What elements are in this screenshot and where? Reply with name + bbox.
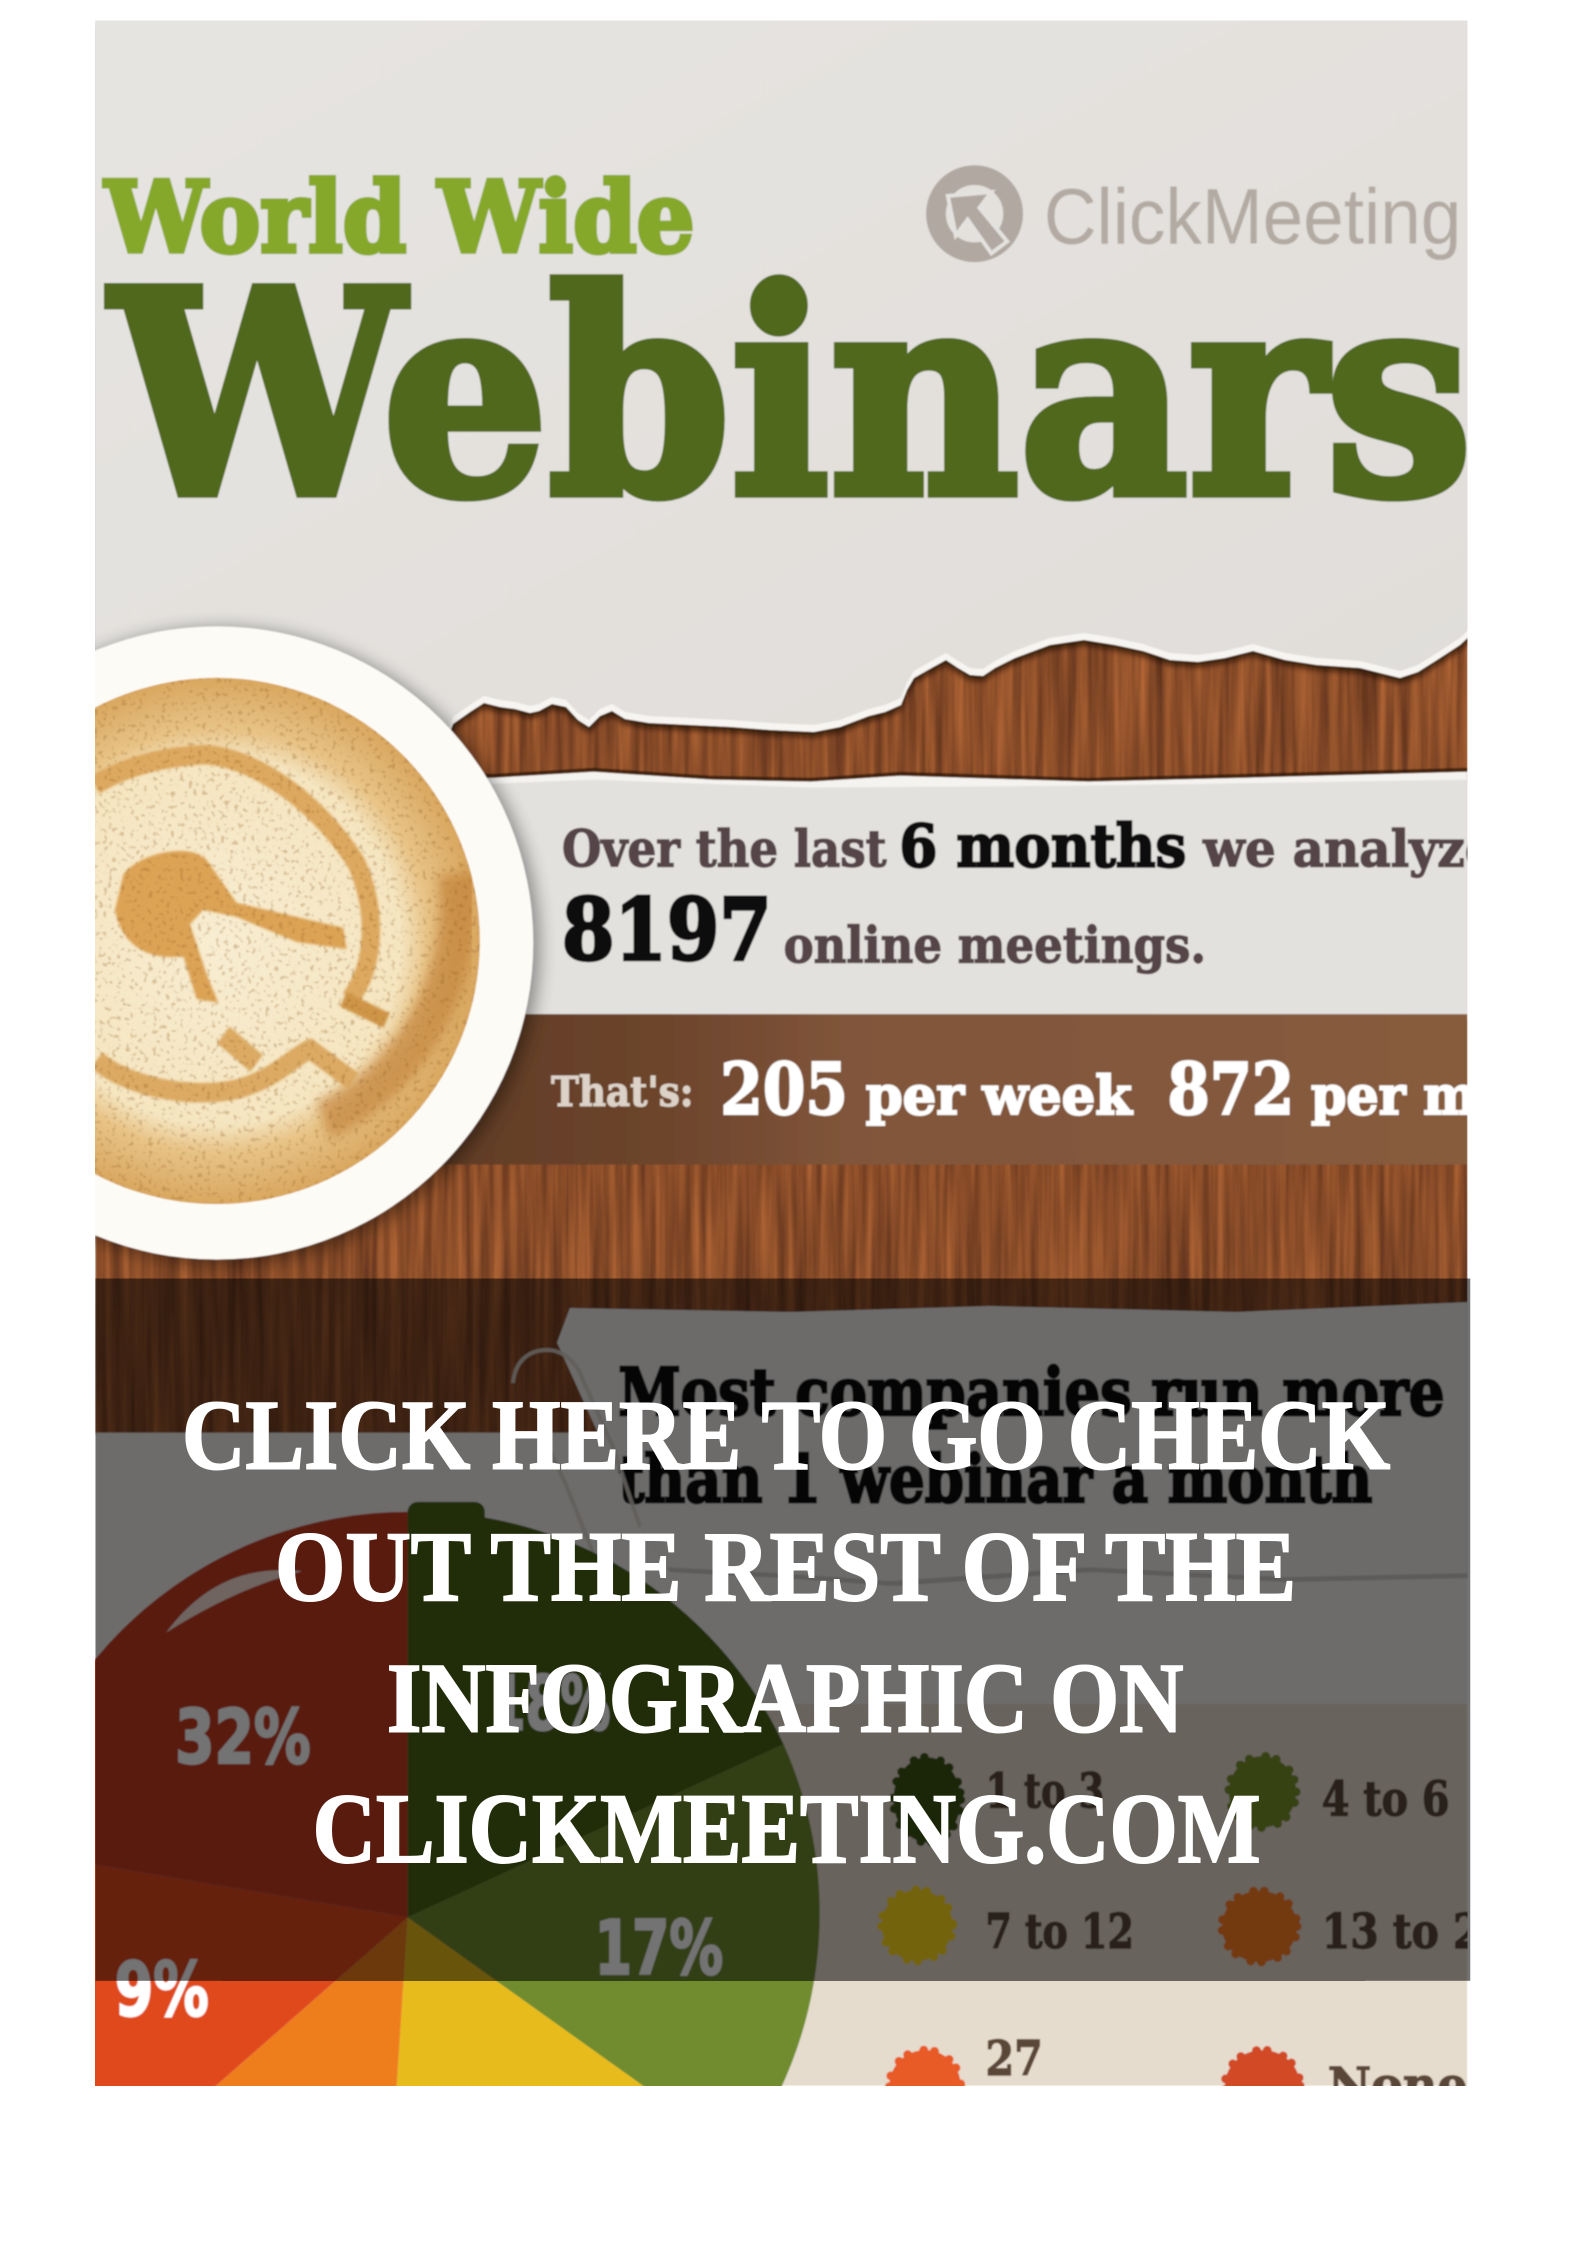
legend item: 1 to 3: 1 to 3 — [985, 1764, 1104, 1820]
slice: yellow — [381, 1917, 741, 2245]
legend item: 27 — [889, 2031, 1043, 2121]
latte art logo — [0, 673, 485, 1207]
wood background — [96, 613, 1467, 1435]
logo wordmark: ClickMeeting — [1044, 171, 1461, 260]
icon: paperclip — [513, 1350, 640, 1553]
foam speckle — [0, 673, 485, 1207]
label: 9%: 9% — [115, 1945, 209, 2033]
pie tab — [408, 1502, 485, 1561]
text: that's: That's: — [551, 1067, 694, 1116]
label: 17%: 17% — [595, 1904, 723, 1992]
slice: dark green — [408, 1512, 784, 1917]
slice: dark red — [8, 1512, 408, 1917]
legend item: 27: 27 — [985, 2031, 1043, 2087]
panel: note paper — [557, 1302, 1470, 1586]
icon: ClickMeeting mark — [936, 175, 1013, 253]
legend item: 13 to 26: 13 to 26 — [1322, 1904, 1510, 1960]
cta line 1: CLICK HERE TO GO CHECK — [182, 1379, 1390, 1490]
label: 32%: 32% — [175, 1693, 311, 1781]
stat: 205 per week: 205 — [720, 1047, 848, 1131]
slice: olive — [408, 1744, 820, 2156]
cta line 2: OUT THE REST OF THE — [275, 1511, 1296, 1622]
cta line 4: CLICKMEETING.COM — [313, 1773, 1260, 1884]
panel: stats paper — [96, 768, 1467, 1019]
icon: coffee cup — [0, 626, 539, 1265]
legend item: 7 to 12 — [882, 1890, 1134, 1961]
panel: top torn paper — [95, 13, 1475, 765]
legend item: 4 to 6 — [1229, 1756, 1449, 1828]
logo: ClickMeeting — [936, 171, 1461, 260]
heading: Webinars: Webinars — [107, 230, 1472, 560]
stat: 205 per week: per week — [866, 1064, 1133, 1127]
overlay panel — [95, 1278, 1470, 1981]
heading: than 1 webinar: than 1 webinar a month — [618, 1442, 1372, 1518]
infographic image — [95, 20, 1468, 2086]
call to action — [182, 1379, 1390, 1884]
legend item: 13 to 26 — [1222, 1891, 1510, 1962]
legend item: 1 to 3 — [893, 1757, 1104, 1842]
heading: World Wide: World Wide — [104, 160, 695, 274]
stat: 872 per month: 872 — [1167, 1047, 1294, 1131]
text: 8197 online meetings — [562, 881, 1206, 981]
text: over the last 6 months: 6 months — [899, 811, 1186, 881]
pie highlight — [166, 1570, 302, 1633]
stat: 205 per week — [720, 1047, 1133, 1131]
stat: 872 per month — [1167, 1047, 1587, 1131]
panel: lower paper — [96, 1433, 1467, 2086]
label: 18%: 18% — [491, 1659, 610, 1747]
text: 8197 online meetings: 8197 — [562, 881, 772, 981]
chart: pie — [8, 1502, 820, 2245]
heading: most companies: Most companies run more — [618, 1355, 1445, 1431]
slice: orange — [99, 1917, 408, 2245]
slice: red orange — [8, 1850, 408, 2189]
legend item: 7 to 12: 7 to 12 — [985, 1904, 1134, 1960]
panel: stats band — [96, 1014, 1587, 1165]
text: over the last 6 months: Over the last — [562, 820, 887, 879]
legend item: 4 to 6: 4 to 6 — [1322, 1772, 1449, 1828]
legend item: none: None — [1328, 2058, 1468, 2114]
legend — [882, 1756, 1510, 2121]
text: over the last 6 months: we analyzed — [1202, 820, 1530, 879]
legend item: none — [1225, 2050, 1468, 2121]
cta line 3: INFOGRAPHIC ON — [387, 1642, 1183, 1753]
text: 8197 online meetings: online meetings. — [784, 917, 1206, 975]
